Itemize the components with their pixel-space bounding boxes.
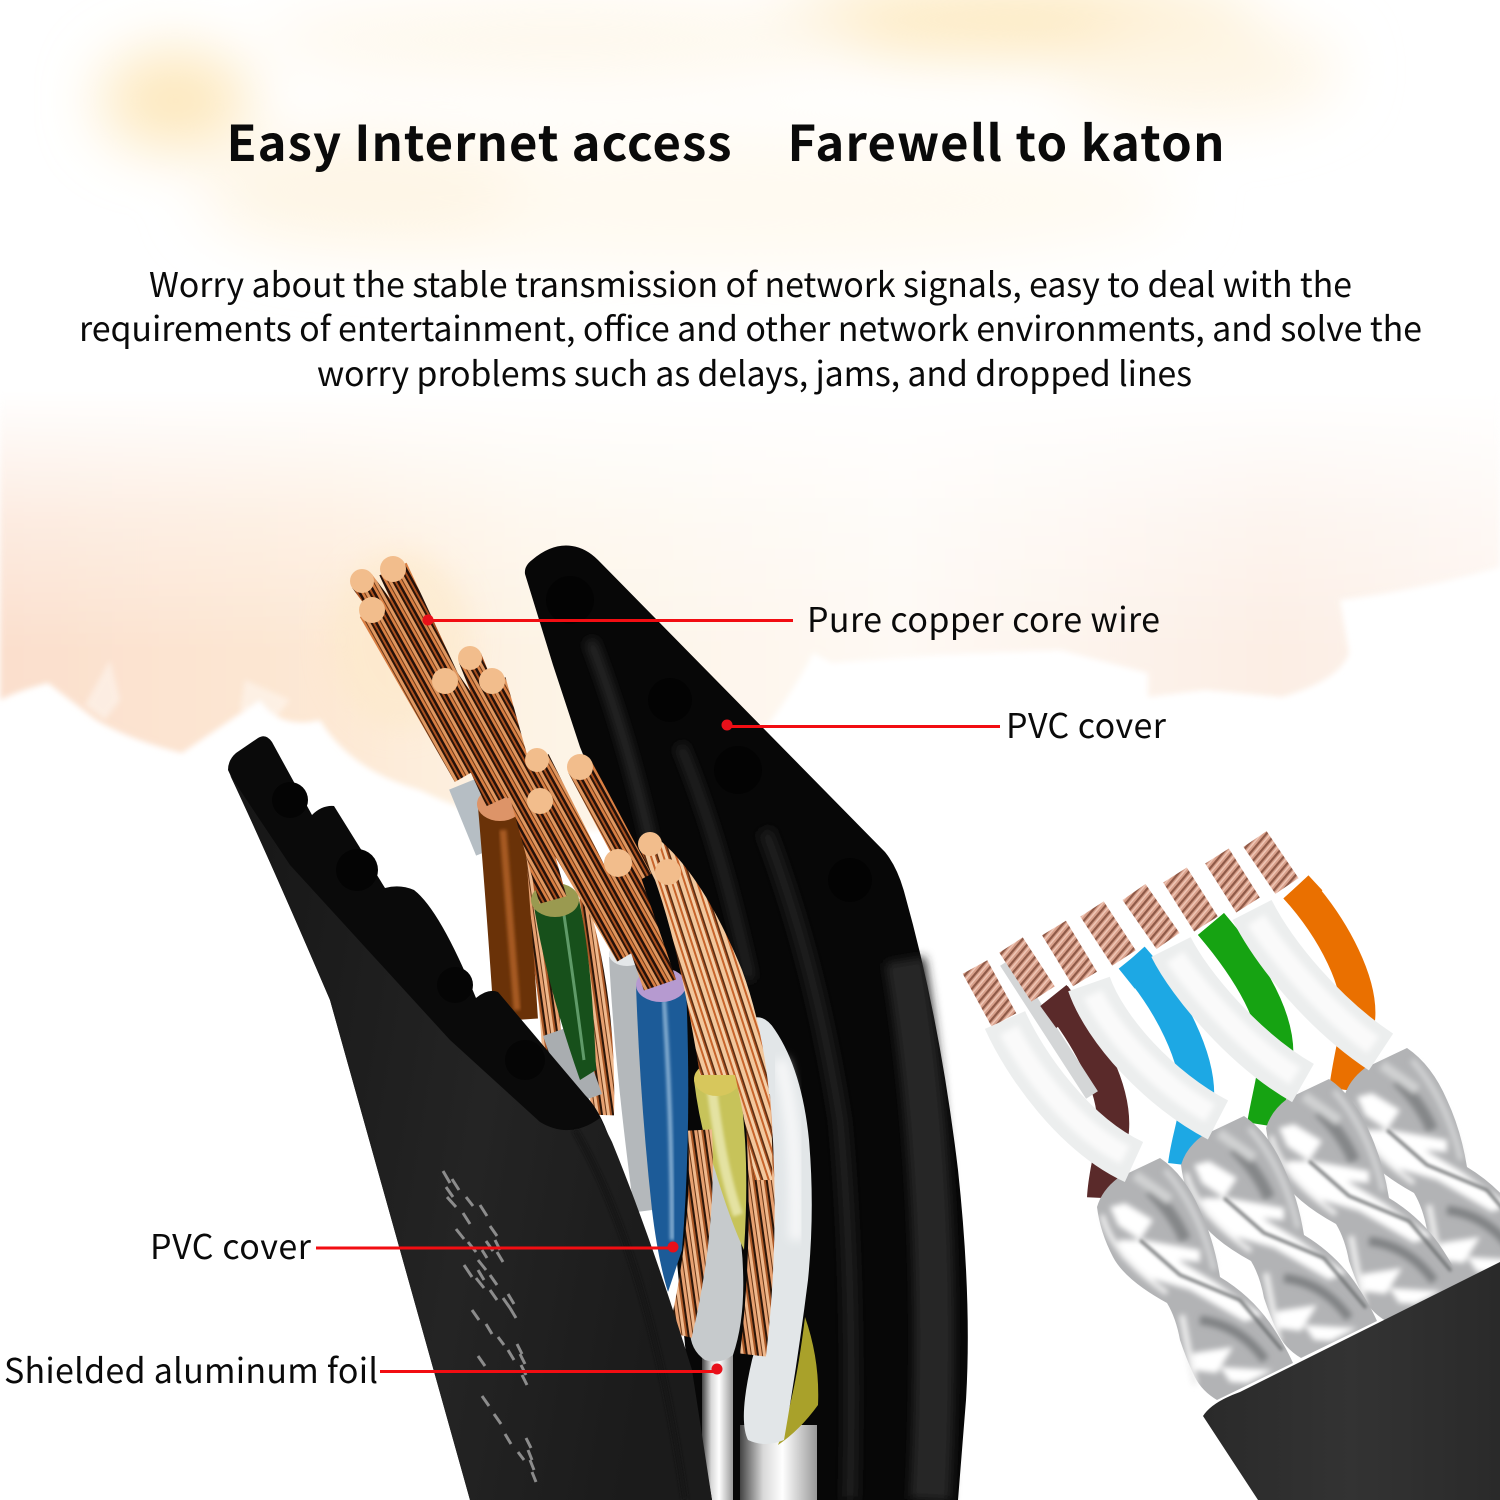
- groove shading on cover inner wall: [590, 640, 934, 1500]
- callout: pure copper core wire: [422, 593, 1160, 642]
- copper strand end caps: [350, 556, 681, 885]
- copper strand: front right: [753, 1095, 762, 1355]
- coloured wire ends over tips: [1054, 887, 1310, 1018]
- wire: silver drain: [1006, 962, 1092, 1095]
- copper bundle: large curved: [640, 842, 772, 1180]
- copper bundles: [362, 569, 772, 1180]
- wire: white large: [744, 1017, 812, 1444]
- wire: gray front: [690, 1150, 743, 1362]
- network cable: twisted pairs: [975, 839, 1500, 1500]
- black flat jacket: [1203, 1262, 1500, 1500]
- callout: PVC cover left: [150, 1220, 678, 1269]
- wire: gray behind green: [560, 1030, 585, 1100]
- wire: green: [531, 883, 596, 1080]
- wire: yellow lower: [778, 1317, 818, 1445]
- description text: [79, 258, 1422, 396]
- description text: requirements of entertainment, office and other network environments, and solve the: [79, 302, 1422, 351]
- wire: silver foil strips: [702, 1350, 817, 1500]
- callout: pure copper core wire: Pure copper core wire: [807, 593, 1160, 642]
- white speckle in wash: [85, 660, 290, 725]
- callout: shielded aluminum foil: [4, 1344, 722, 1393]
- inner wires group: [350, 556, 818, 1500]
- wire: yellow: [694, 1062, 746, 1250]
- background: watercolor wash: [0, 0, 1498, 831]
- title: Farewell to katon: [788, 105, 1224, 176]
- lower copper strands behind wires: [520, 850, 602, 1115]
- copper strand: front left: [680, 1130, 701, 1335]
- callout: PVC cover left: PVC cover: [150, 1220, 312, 1269]
- copper tips: [975, 839, 1287, 1020]
- PVC cover: right half of jacket: [525, 546, 968, 1500]
- callout: PVC cover right: PVC cover: [1006, 699, 1167, 748]
- wire: blue twisted: [1132, 958, 1197, 1165]
- wire: blue: [636, 968, 688, 1292]
- title: Easy Internet access: [226, 105, 732, 176]
- description text: Worry about the stable transmission of network signals, easy to deal with the: [149, 258, 1352, 307]
- title: [226, 105, 1224, 176]
- shielding foil pairs: [1097, 1048, 1500, 1400]
- white wires: [1005, 910, 1381, 1162]
- wire: gray-white: [609, 942, 652, 1210]
- wire: gray stub: [463, 784, 490, 850]
- callout: PVC cover right: [722, 699, 1167, 748]
- description text: worry problems such as delays, jams, and dropped lines: [317, 347, 1192, 396]
- wire: orange twisted: [1296, 887, 1358, 1090]
- printed marking on cover: [443, 1171, 536, 1482]
- wire: brown twisted: [1054, 995, 1113, 1198]
- callout: shielded aluminum foil: Shielded aluminum foil: [4, 1344, 378, 1393]
- wire: green twisted: [1211, 924, 1276, 1125]
- wire: brown: [477, 787, 523, 1020]
- PVC cover: left half of jacket: [228, 736, 712, 1500]
